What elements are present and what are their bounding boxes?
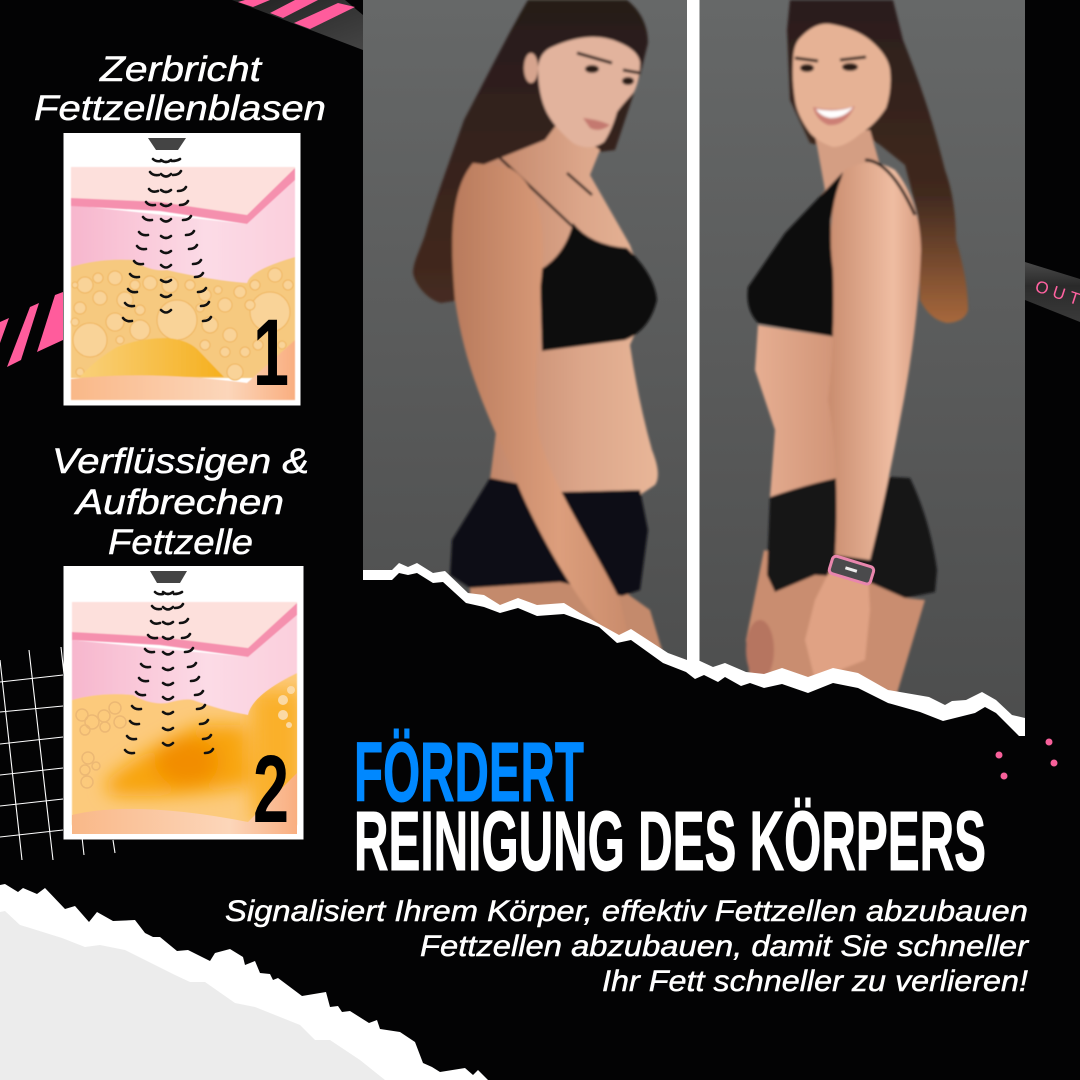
dermis (71, 180, 295, 290)
left woman face (538, 37, 640, 147)
fat cells (71, 268, 293, 380)
under layer (71, 340, 295, 400)
left woman bra (540, 223, 657, 351)
left woman ear (524, 53, 538, 83)
panel: step 1 diagram (64, 133, 300, 406)
bracelet (828, 555, 875, 585)
right woman facial features (795, 57, 866, 125)
title: FÖRDERT (354, 725, 584, 819)
right woman legs (746, 550, 925, 700)
device head (150, 571, 187, 583)
gland (80, 338, 224, 377)
heading: step 1 label: Zerbricht (99, 50, 262, 89)
right woman strap (865, 160, 915, 215)
right woman back hand (746, 620, 774, 680)
left woman straps (500, 158, 592, 226)
decoration: top striped band (232, 0, 363, 50)
right woman hand (805, 560, 870, 680)
right woman bra (747, 172, 862, 340)
decoration: right tag band (1025, 262, 1080, 322)
heading: step 2 label (52, 442, 309, 562)
photo: before, left woman (363, 0, 687, 720)
skin band (72, 603, 297, 657)
left woman facial features (577, 53, 640, 130)
number 2: 2 (253, 736, 289, 843)
decoration: pink stripes left (0, 292, 63, 367)
heading: step 2 label: Fettzelle (108, 523, 253, 562)
heading: step 1 label (34, 50, 326, 128)
residual fat cells (76, 702, 126, 788)
right woman arm (828, 162, 921, 560)
number 1: 1 (253, 300, 289, 406)
left woman legs (470, 580, 665, 660)
body text: Signalisiert Ihrem Körper, effektiv Fettzellen abzubauen (225, 895, 1028, 928)
liquefied fat (105, 690, 302, 820)
decoration: white grid (0, 647, 115, 860)
dermis (72, 615, 297, 720)
right pale cells (278, 686, 295, 728)
photo divider (687, 0, 700, 710)
left woman arm (452, 163, 630, 645)
heading: step 2 label: Aufbrechen (74, 483, 284, 522)
heading: step 2 label: Verflüssigen & (52, 442, 309, 481)
panel: step 2 diagram (64, 566, 304, 843)
right woman shorts (767, 475, 937, 598)
skin top layer (71, 167, 295, 215)
left woman torso (470, 120, 658, 500)
title (354, 725, 986, 888)
photo: after, right woman (700, 0, 1025, 740)
right woman face (793, 24, 890, 147)
ultrasound waves (123, 159, 211, 321)
right woman neck and chest (785, 130, 880, 240)
heading: step 1 label: Fettzellenblasen (34, 89, 326, 128)
skin band (71, 168, 295, 224)
body text: Ihr Fett schneller zu verlieren! (602, 965, 1029, 998)
under layer (72, 773, 297, 834)
body text (225, 895, 1029, 998)
ultrasound waves (125, 592, 213, 753)
fat layer (71, 257, 295, 378)
left woman shorts (450, 478, 648, 596)
torn edge: white strip (363, 563, 1025, 745)
torn edge: black lower area (363, 573, 1025, 760)
body text: Fettzellen abzubauen, damit Sie schneller (420, 930, 1029, 963)
right woman hair (787, 0, 968, 323)
right woman torso (755, 325, 870, 497)
decoration: pink dots (996, 738, 1058, 780)
torn paper corner (0, 884, 488, 1080)
fat layer (72, 673, 297, 825)
device head (148, 138, 186, 150)
skin top layer (72, 602, 297, 648)
left woman hair (413, 0, 648, 303)
